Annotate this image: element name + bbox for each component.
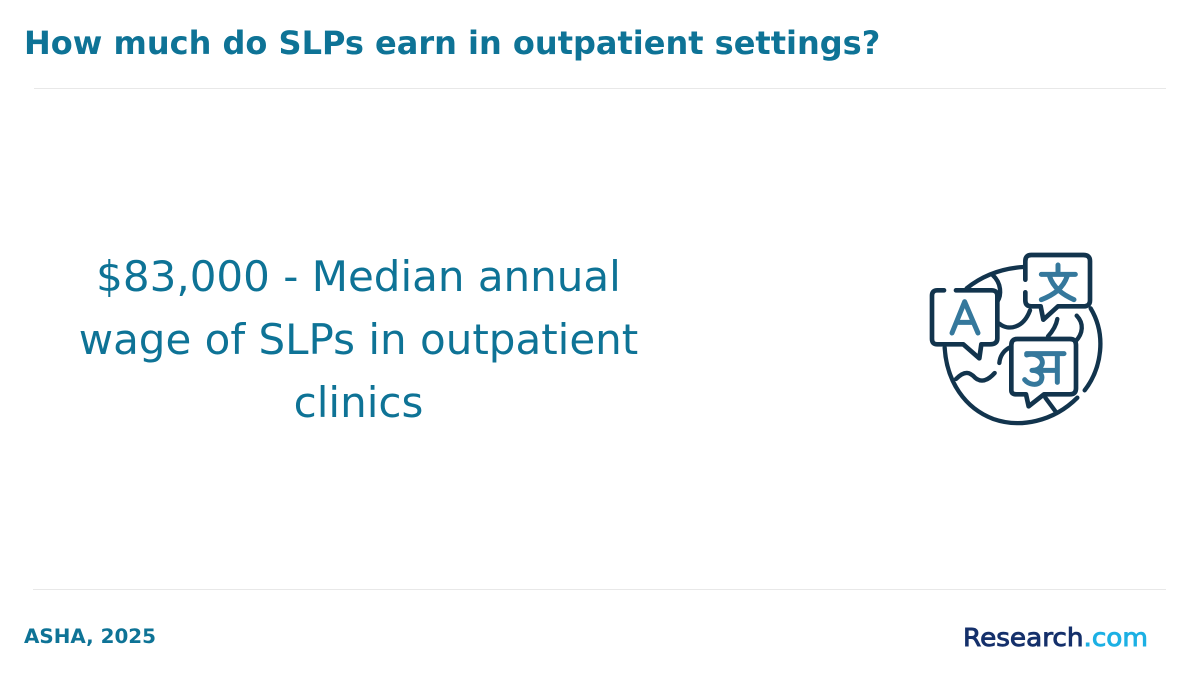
- speech bubble: Chinese: [1025, 255, 1090, 320]
- speech bubble: Devanagari: [1011, 339, 1076, 406]
- source: ASHA, 2025: [24, 625, 156, 648]
- main statistic text: $83,000 - Median annual: [96, 252, 621, 301]
- icon: globe with translation speech bubbles: [930, 252, 1103, 426]
- logo: Research.com: Research.com: [963, 623, 1148, 652]
- title: How much do SLPs earn in outpatient settings?: [24, 24, 880, 62]
- main statistic text: clinics: [294, 378, 423, 427]
- speech bubble: Latin: [932, 290, 997, 358]
- main statistic text: wage of SLPs in outpatient: [79, 315, 638, 364]
- main statistic text: [79, 252, 638, 427]
- globe outline and continents: [945, 267, 1100, 423]
